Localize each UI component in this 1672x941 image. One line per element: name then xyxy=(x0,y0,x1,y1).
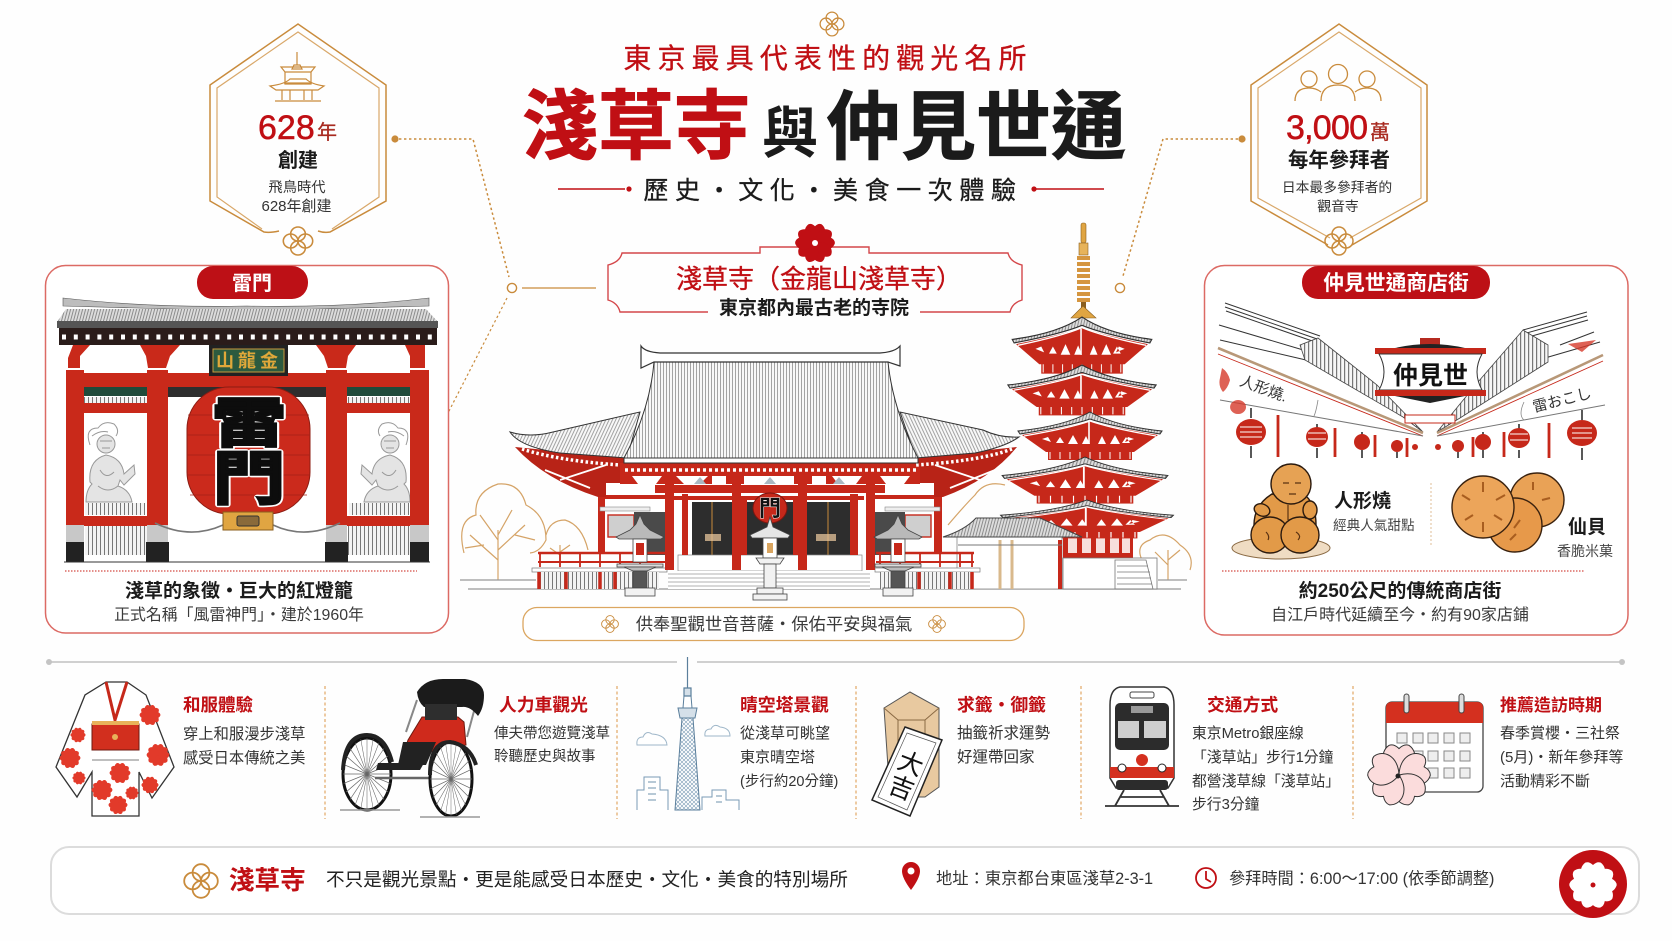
paper lanterns xyxy=(1236,408,1597,460)
item: best season xyxy=(1365,694,1623,809)
icon: kimono xyxy=(56,682,174,816)
connector: right badge to temple xyxy=(1115,135,1246,293)
lower fences xyxy=(84,503,410,555)
item title: 人力車觀光 xyxy=(499,695,588,715)
heading: main title xyxy=(522,85,1126,170)
food label: senbei xyxy=(1557,516,1613,559)
item text: 「淺草站」步行1分鐘 xyxy=(1192,749,1334,766)
illustration: gate xyxy=(57,298,438,562)
heading: main title: 與 xyxy=(762,102,818,165)
section divider xyxy=(46,659,1625,665)
brackets xyxy=(68,345,425,368)
connector: left badge to temple xyxy=(391,135,596,413)
street posts xyxy=(1278,415,1549,458)
lower skirt roofs xyxy=(510,412,1019,458)
icon: knot xyxy=(929,616,945,632)
illustration: street xyxy=(1218,303,1605,460)
hall lantern: 門 xyxy=(759,496,781,521)
icon: train xyxy=(1105,687,1179,806)
item title: 推薦造訪時期 xyxy=(1500,695,1602,715)
hall lantern xyxy=(753,493,787,523)
ground storey xyxy=(1063,520,1133,558)
icon: people xyxy=(1295,64,1381,101)
item text xyxy=(1192,725,1340,813)
food label: senbei: 香脆米菓 xyxy=(1557,543,1613,559)
food label: ningyoyaki xyxy=(1333,490,1415,533)
heading: temple name: 淺草寺（金龍山淺草寺） xyxy=(676,264,962,294)
item text: 俥夫帶您遊覽淺草 xyxy=(494,725,610,742)
heading: main title: 仲見世通 xyxy=(826,85,1126,169)
stat note xyxy=(1282,180,1392,214)
item: kimono xyxy=(56,682,305,816)
item text: 感受日本傳統之美 xyxy=(183,749,305,767)
item text: 抽籤祈求運勢 xyxy=(957,724,1051,742)
label pill: 仲見世通商店街 xyxy=(1323,271,1469,295)
footer tagline: 不只是觀光景點・更是能感受日本歷史・文化・美食的特別場所 xyxy=(326,869,848,890)
item text: 活動精彩不斷 xyxy=(1500,773,1590,790)
icon: Skytree xyxy=(637,657,739,810)
stat note: 628年創建 xyxy=(261,198,332,215)
street roofs xyxy=(1219,303,1600,360)
item title: 和服體驗 xyxy=(183,695,253,715)
stat note: 飛鳥時代 xyxy=(268,179,326,196)
stat label: 每年參拜者 xyxy=(1288,148,1390,172)
icon: plum crest xyxy=(794,224,836,264)
shop signs xyxy=(1237,373,1593,416)
icon: knot xyxy=(283,227,313,255)
panel: Kaminarimon gate xyxy=(46,266,448,633)
guardian statue left xyxy=(86,423,135,502)
item text: 步行3分鐘 xyxy=(1192,796,1260,813)
subtitle xyxy=(558,177,1104,205)
food: senbei xyxy=(1452,473,1564,552)
subheading: 東京都內最古老的寺院 xyxy=(719,296,909,319)
icon: omikuji: 大 xyxy=(894,747,927,782)
item text: (5月)・新年參拜等 xyxy=(1500,748,1623,766)
cross beam xyxy=(66,373,429,387)
icon: omikuji xyxy=(872,692,942,816)
icon: knot xyxy=(1325,227,1353,255)
street eaves xyxy=(1300,330,1548,432)
footer brand: 淺草寺 xyxy=(229,867,306,895)
heading: main title: 淺草寺 xyxy=(522,85,750,170)
stairs platform xyxy=(668,555,870,589)
pagoda base xyxy=(1063,558,1157,589)
icon: temple xyxy=(270,52,324,101)
icon: cherry blossom badge xyxy=(1559,850,1627,918)
guardian statue right xyxy=(361,423,410,502)
giant lantern: 雷 xyxy=(212,393,286,454)
roof ridge xyxy=(641,346,900,368)
panel: Nakamise shopping street xyxy=(1204,266,1628,635)
subtitle: 歷史・文化・美食一次體驗 xyxy=(643,177,1023,205)
caption note: 自江戶時代延續至今・約有90家店鋪 xyxy=(1271,606,1529,624)
label pill xyxy=(1302,266,1490,299)
item text: 東京Metro銀座線 xyxy=(1192,725,1304,742)
red crests xyxy=(1219,340,1596,414)
item: rickshaw xyxy=(340,679,610,817)
item: Skytree xyxy=(637,657,838,810)
icon: rickshaw xyxy=(340,679,484,817)
item text xyxy=(957,724,1051,766)
item text: 春季賞櫻・三社祭 xyxy=(1500,725,1620,742)
columns xyxy=(598,483,942,570)
stat note: 日本最多參拜者的 xyxy=(1282,180,1392,195)
shop signs: 人形燒. xyxy=(1237,373,1289,406)
callout: enshrined deity xyxy=(523,608,1024,640)
stat badge: annual visitors xyxy=(1251,24,1427,255)
item text xyxy=(183,726,305,767)
title block xyxy=(522,43,1126,205)
lantern bands xyxy=(1240,427,1592,440)
roof xyxy=(57,298,438,345)
caption note: 正式名稱「風雷神門」・建於1960年 xyxy=(114,606,364,624)
caption heading: 約250公尺的傳統商店街 xyxy=(1299,579,1501,602)
item text: 穿上和服漫步淺草 xyxy=(183,726,305,743)
food label: ningyoyaki: 經典人氣甜點 xyxy=(1333,518,1415,533)
illustration: side gate xyxy=(943,518,1082,589)
red eaves xyxy=(515,447,1017,497)
side windows xyxy=(608,515,931,537)
item title: 交通方式 xyxy=(1207,694,1278,715)
center stone lantern xyxy=(750,517,790,600)
giant lantern xyxy=(187,387,310,530)
spire xyxy=(1071,223,1096,318)
street fascia xyxy=(1218,348,1605,436)
plaque: 山龍金 xyxy=(216,350,282,371)
item title: 求籤・御籤 xyxy=(957,694,1046,715)
caption heading: 淺草的象徵・巨大的紅燈籠 xyxy=(125,579,353,602)
icon: knot xyxy=(184,864,218,898)
plaque xyxy=(209,345,288,376)
illustration: trees xyxy=(462,484,1191,580)
upper transoms xyxy=(83,387,410,413)
stat number: 年 xyxy=(317,121,337,144)
icon: knot xyxy=(602,616,618,632)
item title: 晴空塔景觀 xyxy=(740,694,829,715)
center gate sign xyxy=(1375,338,1486,423)
icon: top knot ornament xyxy=(820,12,844,36)
item dividers xyxy=(325,686,1353,819)
side panels xyxy=(83,413,147,562)
lantern ropes xyxy=(155,523,340,532)
center gate sign: 仲見世 xyxy=(1393,362,1468,390)
upper roof xyxy=(624,362,918,458)
item text: (步行約20分鐘) xyxy=(740,773,838,790)
item: omikuji xyxy=(872,692,1051,816)
giant lantern: 雷 xyxy=(212,393,286,454)
item text xyxy=(494,725,610,765)
stone lanterns xyxy=(616,515,664,596)
item text: 好運帶回家 xyxy=(957,748,1035,766)
item: transport xyxy=(1105,687,1340,813)
item text: 東京晴空塔 xyxy=(740,749,815,766)
food label: ningyoyaki: 人形燒 xyxy=(1334,490,1391,512)
item text: 從淺草可眺望 xyxy=(740,725,830,742)
icon: calendar with cherry blossom xyxy=(1365,694,1483,809)
panel: center temple heading xyxy=(608,224,1022,319)
stat number: 628 xyxy=(258,109,315,147)
food label: senbei: 仙貝 xyxy=(1568,516,1606,538)
food: ningyoyaki xyxy=(1232,464,1330,559)
pillars xyxy=(64,370,430,562)
railings and plinths xyxy=(532,552,980,589)
label pill xyxy=(197,266,308,299)
icon: clock xyxy=(1196,868,1216,888)
item text xyxy=(740,725,838,790)
giant lantern: 門 xyxy=(213,447,285,511)
stat note xyxy=(261,179,332,215)
footer bar xyxy=(51,847,1639,918)
item text: 都營淺草線「淺草站」 xyxy=(1192,773,1340,790)
item text xyxy=(1500,725,1623,790)
illustration: main hall xyxy=(510,346,1019,600)
icon: location pin xyxy=(902,862,920,890)
stat note: 觀音寺 xyxy=(1317,198,1359,214)
beams xyxy=(600,485,940,511)
shop signs: 雷おこし xyxy=(1531,385,1593,416)
stat number: 3,000 xyxy=(1286,109,1368,147)
illustration: five-storey pagoda xyxy=(1001,223,1173,589)
side dark bays xyxy=(634,512,905,555)
illustration: ground lines xyxy=(460,580,1187,589)
walls xyxy=(598,483,942,554)
label pill: 雷門 xyxy=(232,273,272,295)
heading: tagline: 東京最具代表性的觀光名所 xyxy=(623,43,1033,74)
stat badge: founding year xyxy=(210,24,386,255)
stat label: 創建 xyxy=(278,149,318,172)
icon: omikuji: 吉 xyxy=(884,771,918,806)
doors xyxy=(692,502,850,555)
callout: enshrined deity: 供奉聖觀世音菩薩・保佑平安與福氣 xyxy=(636,614,912,634)
stat number: 萬 xyxy=(1370,121,1390,144)
giant lantern: 門 xyxy=(213,447,285,511)
opening hours: 參拜時間：6:00～17:00 (依季節調整) xyxy=(1229,869,1494,888)
item text: 聆聽歷史與故事 xyxy=(494,748,596,765)
address: 地址：東京都台東區淺草2-3-1 xyxy=(936,870,1153,888)
